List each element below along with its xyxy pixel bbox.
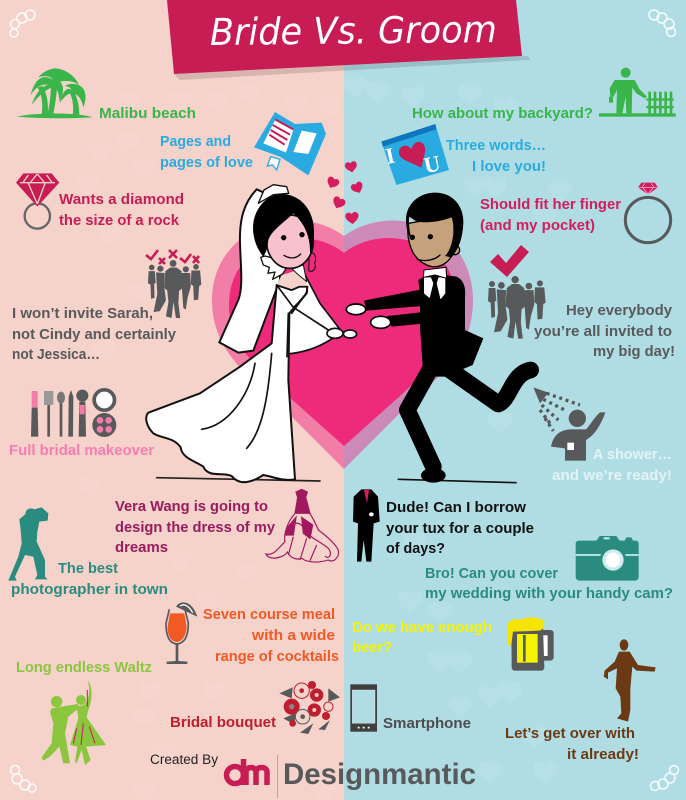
tiara: [258, 185, 289, 203]
label: guest list bride: not Cindy and certainly: [12, 326, 177, 343]
label: Dude: Dude! Can I borrow: [386, 499, 526, 516]
label: A shower: and we’re ready!: [552, 467, 672, 484]
corner ornament: top left: [10, 10, 35, 37]
panel: groom side background: [344, 0, 686, 800]
icon: crowd groom: [488, 276, 546, 339]
smile: [284, 254, 301, 258]
label: Seven course meal: Seven course meal: [203, 606, 335, 623]
hands: [346, 304, 366, 315]
label: best photographer: [11, 560, 168, 598]
icon: designer gown: [266, 489, 339, 562]
label: Malibu beach: Malibu beach: [99, 105, 196, 122]
card letter I: I: [383, 143, 397, 169]
label: Hey everybody: you’re all invited to: [534, 323, 672, 340]
flying hearts: [325, 161, 365, 225]
right frill: [292, 265, 307, 282]
label: Bro: my wedding with your handy cam?: [425, 585, 673, 602]
icon: waltzing couple: [42, 680, 106, 765]
label: Three words: I love you!: [472, 158, 546, 175]
label: Vera Wang: design the dress of my: [115, 519, 276, 536]
label: Should fit her finger: Should fit her finger: [480, 196, 621, 213]
hands: [327, 328, 343, 338]
credit: Created By: Created By: [150, 752, 218, 767]
icon: I love U card: [381, 124, 449, 185]
label: Let's get over with: it already!: [567, 746, 639, 763]
jacket: [418, 273, 483, 377]
ground line: [157, 478, 320, 481]
icon: open book: [254, 112, 326, 175]
label: Wants a diamond: the size of a rock: [59, 212, 180, 229]
icon: check mark: [490, 245, 529, 277]
label: A shower: [552, 446, 672, 484]
ear: [450, 245, 460, 255]
label: Bridal bouquet: Bridal bouquet: [170, 714, 276, 731]
label: Pages and pages of love: Pages and: [160, 133, 231, 150]
label: Pages and pages of love: pages of love: [160, 154, 253, 171]
bodice lines: [277, 285, 328, 330]
collar frill: [261, 256, 287, 279]
label: Should fit her finger: [480, 196, 621, 234]
veil: [219, 189, 280, 353]
label: Let's get over with: Let’s get over with: [505, 725, 635, 742]
label: Hey everybody: Hey everybody: [566, 302, 673, 319]
label: Three words: [446, 137, 546, 175]
icon: beer mug: [507, 617, 554, 671]
hair: [253, 194, 314, 257]
chest: [277, 268, 307, 290]
icon: man with open arms: [604, 639, 656, 722]
label: Let's get over with: [505, 725, 639, 763]
corner ornament: top right: [649, 10, 676, 36]
face: [267, 215, 313, 268]
label: beer: beer?: [352, 639, 392, 656]
arms: [364, 289, 422, 311]
central heart: [212, 221, 473, 469]
wedding dress: [146, 285, 307, 482]
label: Pages and pages of love: [160, 133, 253, 171]
label: beer: [352, 619, 492, 656]
label: best photographer: photographer in town: [11, 581, 168, 598]
icon: gardener at fence: [599, 68, 676, 117]
bride figure: [146, 185, 357, 482]
legs: [407, 367, 531, 467]
label: beer: Do we have enough: [352, 619, 492, 636]
smile: [417, 255, 440, 261]
label: Hey everybody: [534, 302, 675, 360]
hair ribbon: [309, 253, 316, 271]
dress folds: [202, 313, 288, 448]
icon: palm trees: [17, 68, 93, 118]
faint heart pattern: [76, 76, 572, 800]
label: Hey everybody: my big day!: [593, 343, 675, 360]
label: Seven course meal: with a wide: [251, 627, 335, 644]
label: Vera Wang: [115, 498, 276, 556]
face: [408, 215, 457, 267]
title banner: [167, 0, 530, 80]
label: Should fit her finger: (and my pocket): [480, 217, 595, 234]
label: best photographer: The best: [58, 560, 118, 577]
label: Dude: [386, 499, 534, 557]
collar: [423, 267, 447, 278]
sleeve: [287, 268, 342, 354]
logo: dm mark: [226, 759, 267, 785]
label: Dude: of days?: [386, 540, 445, 557]
label: guest list bride: not Jessica…: [12, 346, 100, 363]
label: Seven course meal: range of cocktails: [215, 648, 339, 665]
label: guest list bride: I won’t invite Sarah,: [12, 305, 153, 322]
hair: [406, 193, 463, 257]
panel: bride side background: [0, 0, 344, 800]
icon: smartphone: [350, 684, 377, 732]
icon: photographer: [8, 507, 48, 581]
label: Wants a diamond: Wants a diamond: [59, 191, 184, 208]
corner ornament: bottom left: [10, 766, 36, 792]
label: Long endless Waltz: Long endless Waltz: [16, 659, 152, 676]
card letter U: U: [422, 150, 443, 178]
logo: Designmantic: Designmantic: [283, 758, 476, 791]
shoe: [421, 468, 446, 483]
label: A shower: A shower…: [593, 446, 672, 463]
label: backyard: How about my backyard?: [412, 105, 593, 122]
icon: crowd with ticks and crosses: [146, 250, 201, 318]
eyes: [410, 235, 415, 240]
label: Three words: Three words…: [446, 137, 546, 154]
label: Smartphone: Smartphone: [383, 715, 471, 732]
label: Vera Wang: Vera Wang is going to: [115, 498, 268, 515]
label: Bro: Bro! Can you cover: [425, 565, 558, 582]
corner ornament: bottom right: [650, 766, 678, 790]
eyes: [281, 235, 286, 240]
label: Dude: your tux for a couple: [386, 520, 534, 537]
title: Bride Vs. Groom: [210, 8, 497, 54]
icon: tuxedo: [353, 489, 380, 562]
icon: camera: [576, 536, 639, 581]
icon: makeup set: [31, 388, 116, 437]
icon: shower: [533, 387, 605, 461]
label: Seven course meal: [203, 606, 339, 665]
label: Bro: [425, 565, 673, 602]
logo divider: [277, 755, 278, 798]
ground line: [398, 479, 516, 483]
label: Full bridal makeover: Full bridal makeover: [9, 442, 154, 459]
groom figure: [346, 193, 531, 483]
label: Wants a diamond: [59, 191, 184, 229]
label: Vera Wang: dreams: [115, 539, 168, 556]
icon: cocktail glass: [166, 602, 197, 664]
icon: small diamond ring: [625, 183, 671, 243]
label: guest list bride: [12, 305, 177, 363]
icon: bouquet: [279, 681, 340, 734]
icon: diamond ring: [16, 173, 59, 229]
shirt and tie: [424, 277, 445, 300]
